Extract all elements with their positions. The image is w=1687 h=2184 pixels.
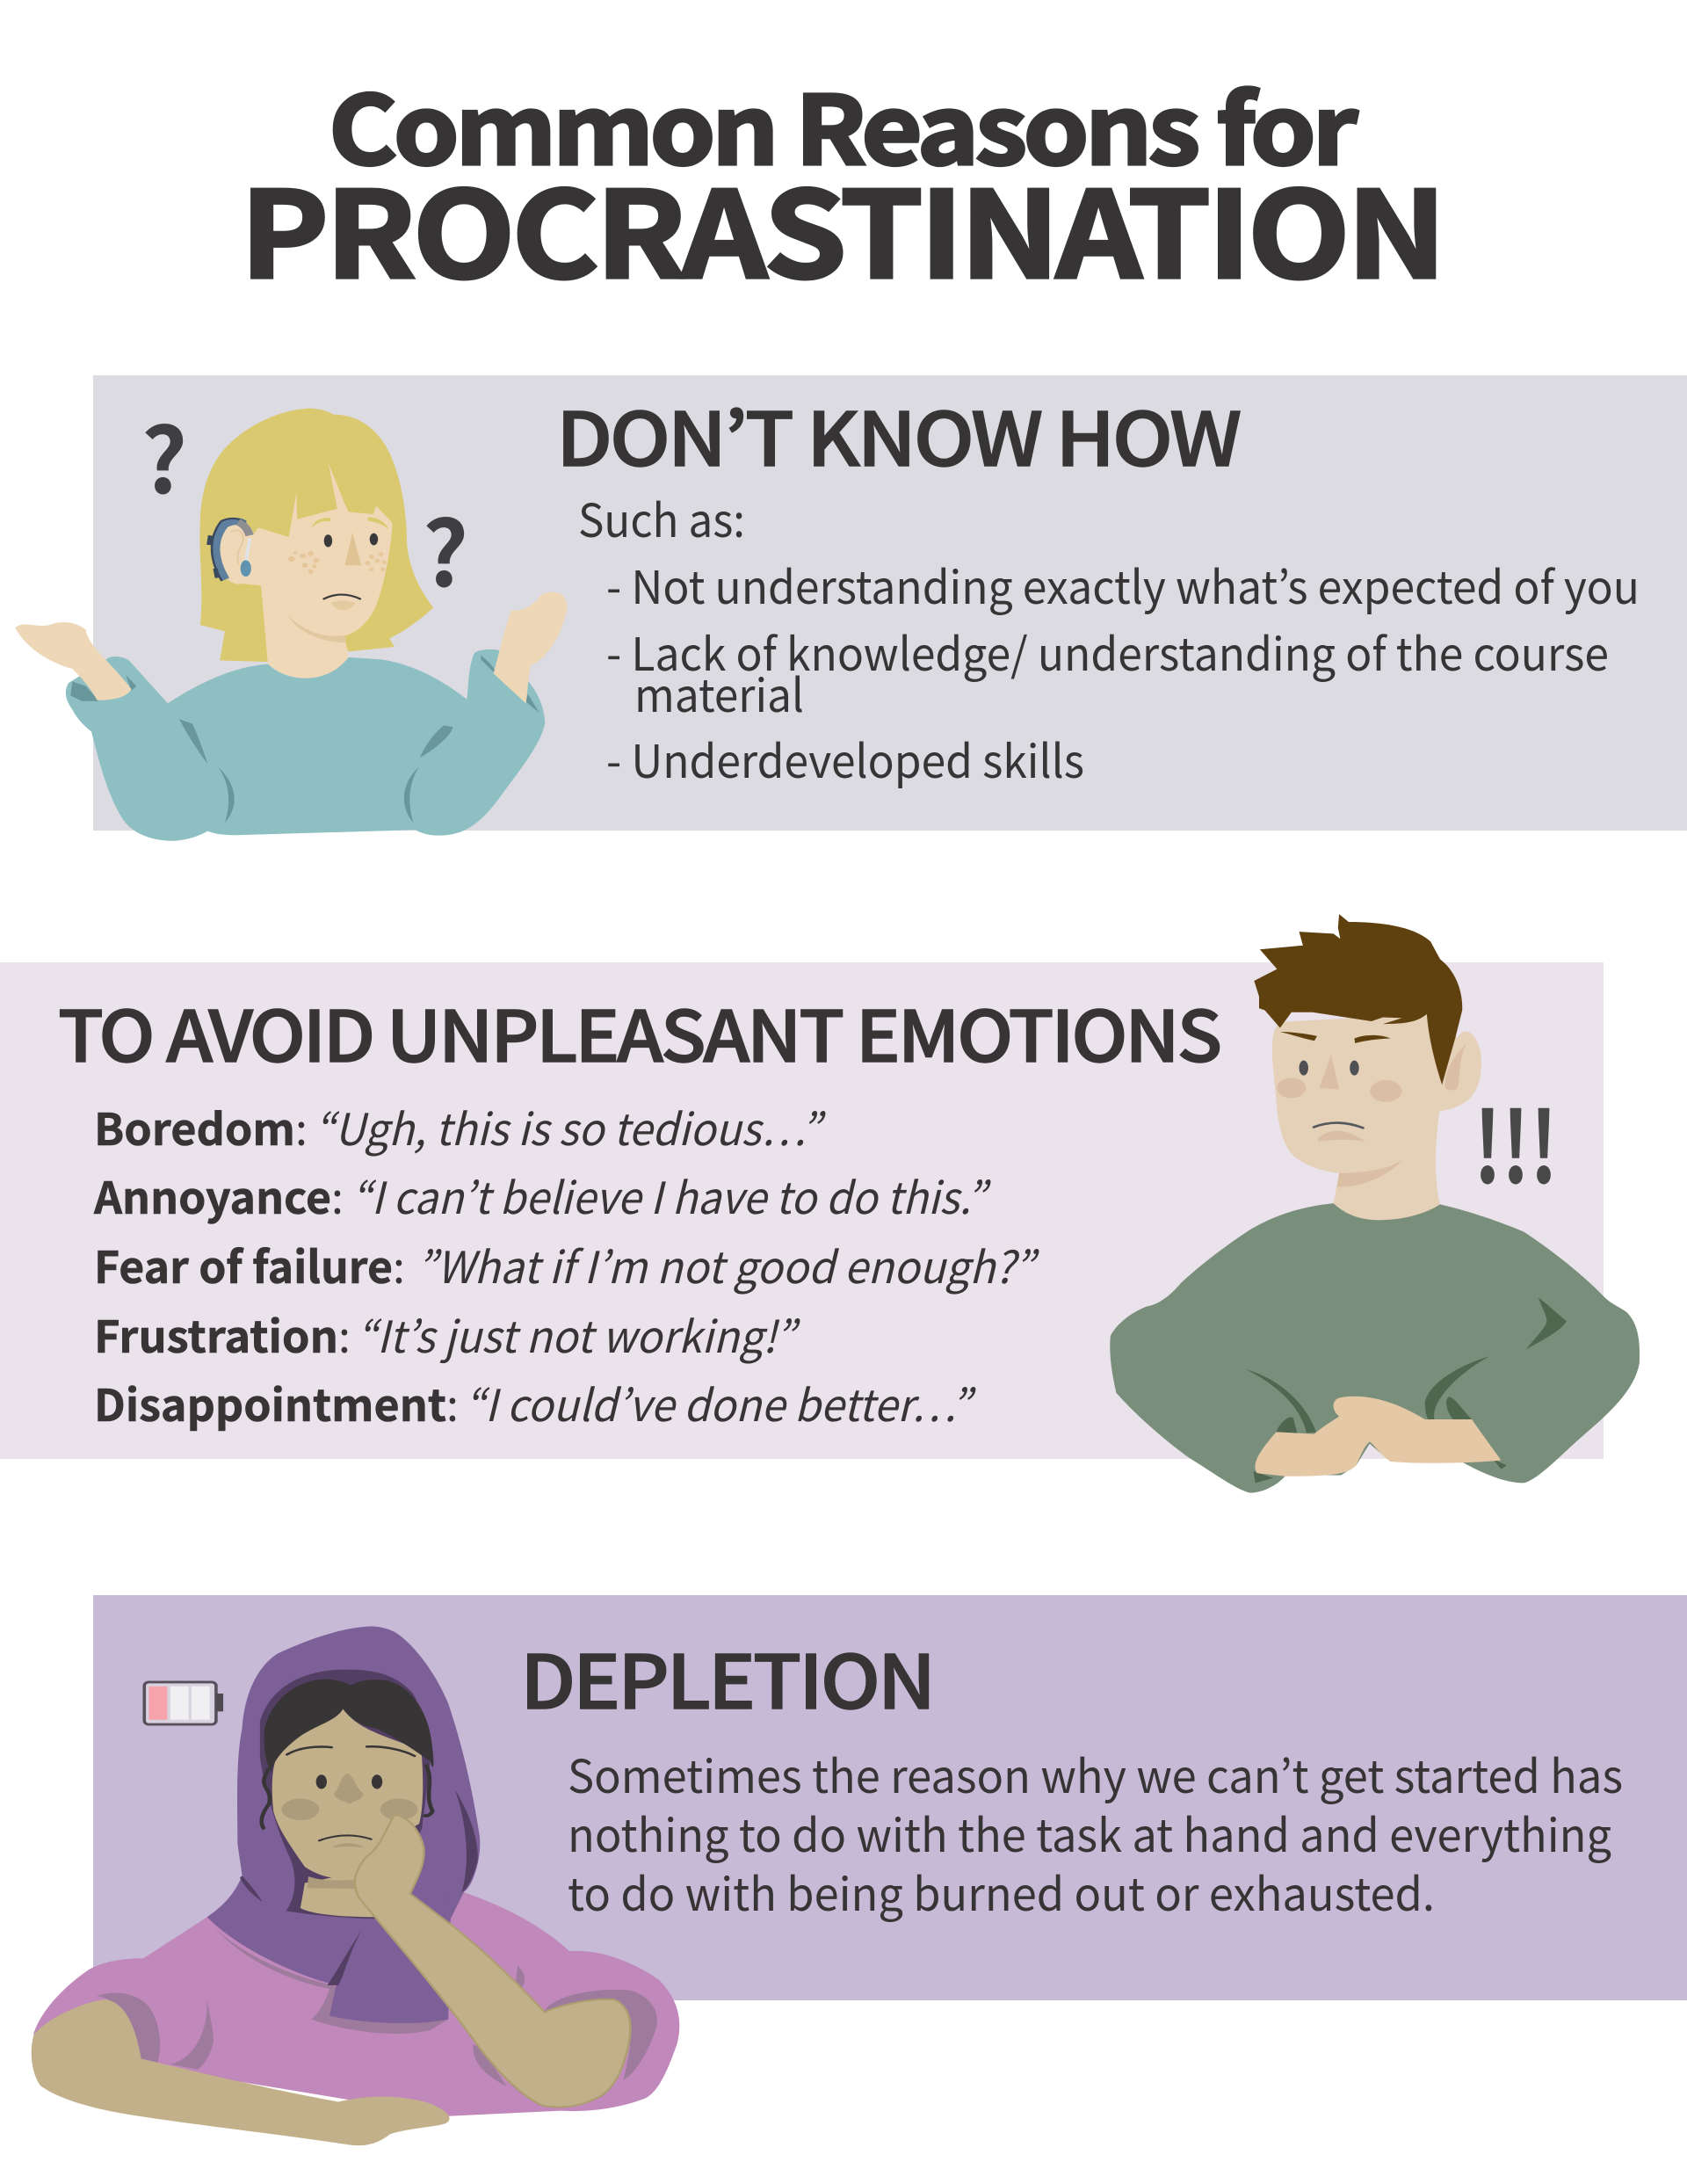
text: depletion description: [568, 1740, 1623, 1924]
icon: low battery: [144, 1682, 223, 1724]
icon: exclamation marks: !!!: [1473, 1070, 1558, 1212]
title: Common Reasons for: [329, 55, 1358, 192]
title: [240, 55, 1443, 313]
text: such as list: [578, 484, 1640, 791]
text: emotion examples: Annoyance: [93, 1164, 331, 1227]
illustration: annoyed man: [1110, 914, 1640, 1493]
illustration: tired person with headscarf: [32, 1626, 679, 2145]
text: such as list: material: [634, 659, 804, 725]
title: PROCRASTINATION: [240, 140, 1443, 313]
text: emotion examples: :: [295, 1095, 308, 1158]
heading: depletion: DEPLETION: [520, 1624, 933, 1731]
text: emotion examples: “Ugh, this is so tedious…”: [315, 1095, 826, 1158]
text: such as list: - Underdeveloped skills: [606, 725, 1084, 791]
text: emotion examples: “I could’ve done better…”: [465, 1371, 976, 1434]
panel: depletion: [32, 1595, 1687, 2145]
icon: question mark left: ?: [141, 390, 187, 519]
text: depletion description: to do with being burned out or exhausted.: [568, 1858, 1435, 1924]
text: emotion examples: Frustration: [94, 1302, 338, 1366]
heading: don't know how: DON’T KNOW HOW: [556, 381, 1241, 488]
text: such as list: - Not understanding exactly what’s expected of you: [606, 551, 1640, 617]
text: emotion examples: ”What if I’m not good enough?”: [416, 1233, 1039, 1296]
illustration: confused person with hearing aid: [15, 409, 567, 841]
text: emotion examples: “It’s just not working!”: [357, 1302, 800, 1366]
text: emotion examples: Boredom: [94, 1095, 295, 1158]
heading: to avoid unpleasant emotions: TO AVOID UNPLEASANT EMOTIONS: [58, 981, 1220, 1083]
text: depletion description: Sometimes the reason why we can’t get started has: [568, 1740, 1623, 1806]
panel: to avoid unpleasant emotions: [0, 914, 1640, 1493]
panel: don't know how: [15, 375, 1687, 841]
icon: question mark right: ?: [423, 483, 468, 613]
text: emotion examples: :: [338, 1302, 351, 1366]
text: emotion examples: “I can’t believe I have to do this.”: [351, 1164, 991, 1227]
text: depletion description: nothing to do with the task at hand and everything: [568, 1799, 1611, 1865]
text: such as list: Such as:: [578, 484, 745, 550]
text: emotion examples: [93, 1095, 1039, 1434]
text: emotion examples: :: [393, 1233, 405, 1296]
text: emotion examples: :: [446, 1371, 459, 1434]
text: emotion examples: Fear of failure: [94, 1233, 393, 1296]
text: emotion examples: Disappointment: [94, 1371, 446, 1434]
text: emotion examples: :: [331, 1164, 344, 1227]
text: such as list: - Lack of knowledge/ understanding of the course: [606, 618, 1609, 684]
